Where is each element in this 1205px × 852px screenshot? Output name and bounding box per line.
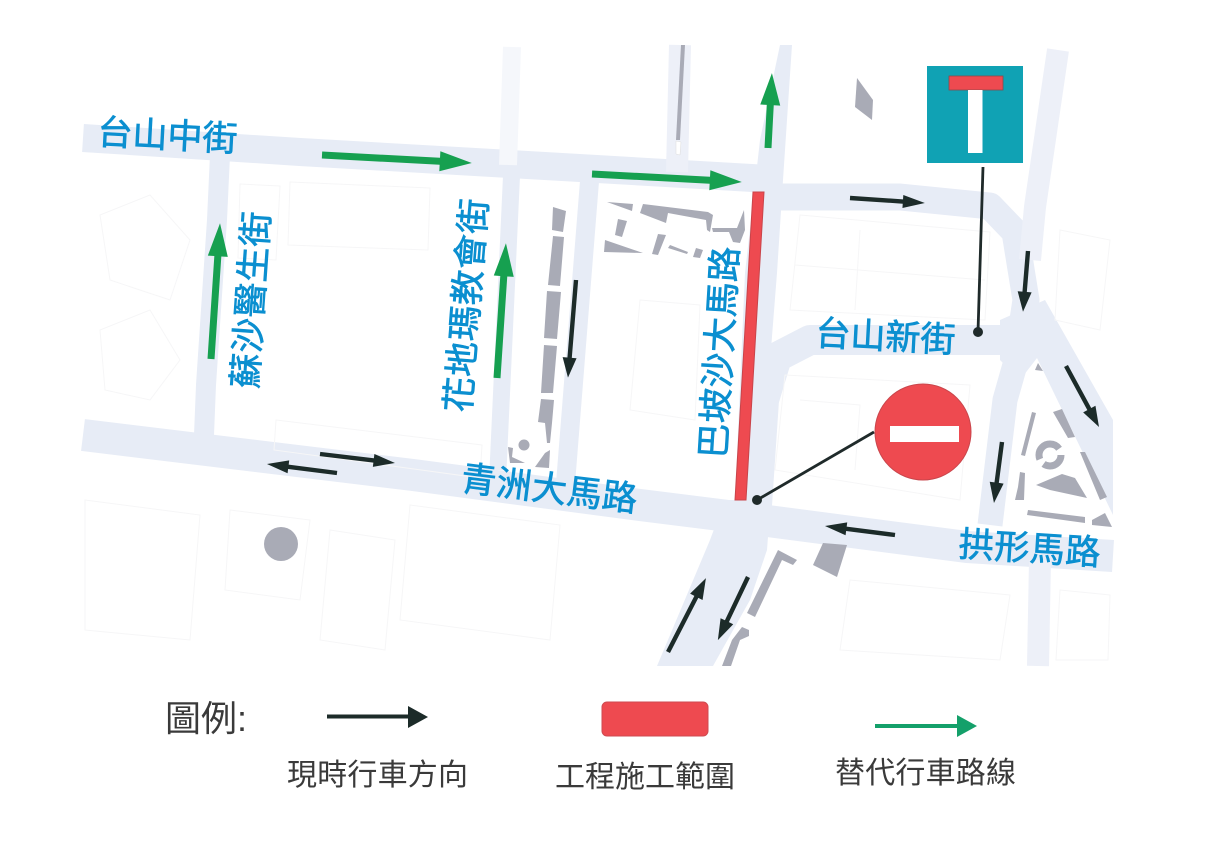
sign: dead end — [927, 66, 1023, 163]
map: road network — [83, 45, 1113, 666]
current traffic direction: black arrows — [266, 192, 1105, 655]
legend title: 圖例: — [165, 698, 247, 739]
construction zone: red bar on 巴坡沙大馬路 — [735, 192, 764, 500]
sign: no entry — [875, 384, 971, 480]
legend label: current direction: 現時行車方向 — [287, 759, 468, 792]
legend label: construction zone: 工程施工範圍 — [555, 761, 735, 794]
road label: 蘇沙醫生街: 蘇沙醫生街 — [226, 210, 277, 390]
callout: dead end leader line — [973, 167, 983, 337]
legend icon: black arrow — [327, 706, 428, 728]
legend label: alternative route: 替代行車路線 — [835, 757, 1016, 790]
road label: 台山新街: 台山新街 — [815, 314, 956, 360]
alternative routes: green arrows — [201, 73, 782, 379]
map: white pedestrian mark — [676, 141, 681, 155]
road label: 台山中街: 台山中街 — [97, 113, 238, 159]
road label: 青洲大馬路: 青洲大馬路 — [459, 459, 639, 520]
road label: 巴坡沙大馬路: 巴坡沙大馬路 — [694, 246, 746, 459]
callout: no entry leader line — [752, 432, 874, 505]
legend icon: green arrow — [875, 715, 977, 737]
legend — [165, 698, 1016, 794]
road label: 拱形馬路: 拱形馬路 — [957, 525, 1102, 573]
map: faint building outlines — [85, 182, 1110, 660]
legend icon: construction zone — [602, 702, 708, 736]
road label: 花地瑪教會街: 花地瑪教會街 — [439, 197, 495, 414]
map: grey buildings — [264, 45, 1112, 666]
